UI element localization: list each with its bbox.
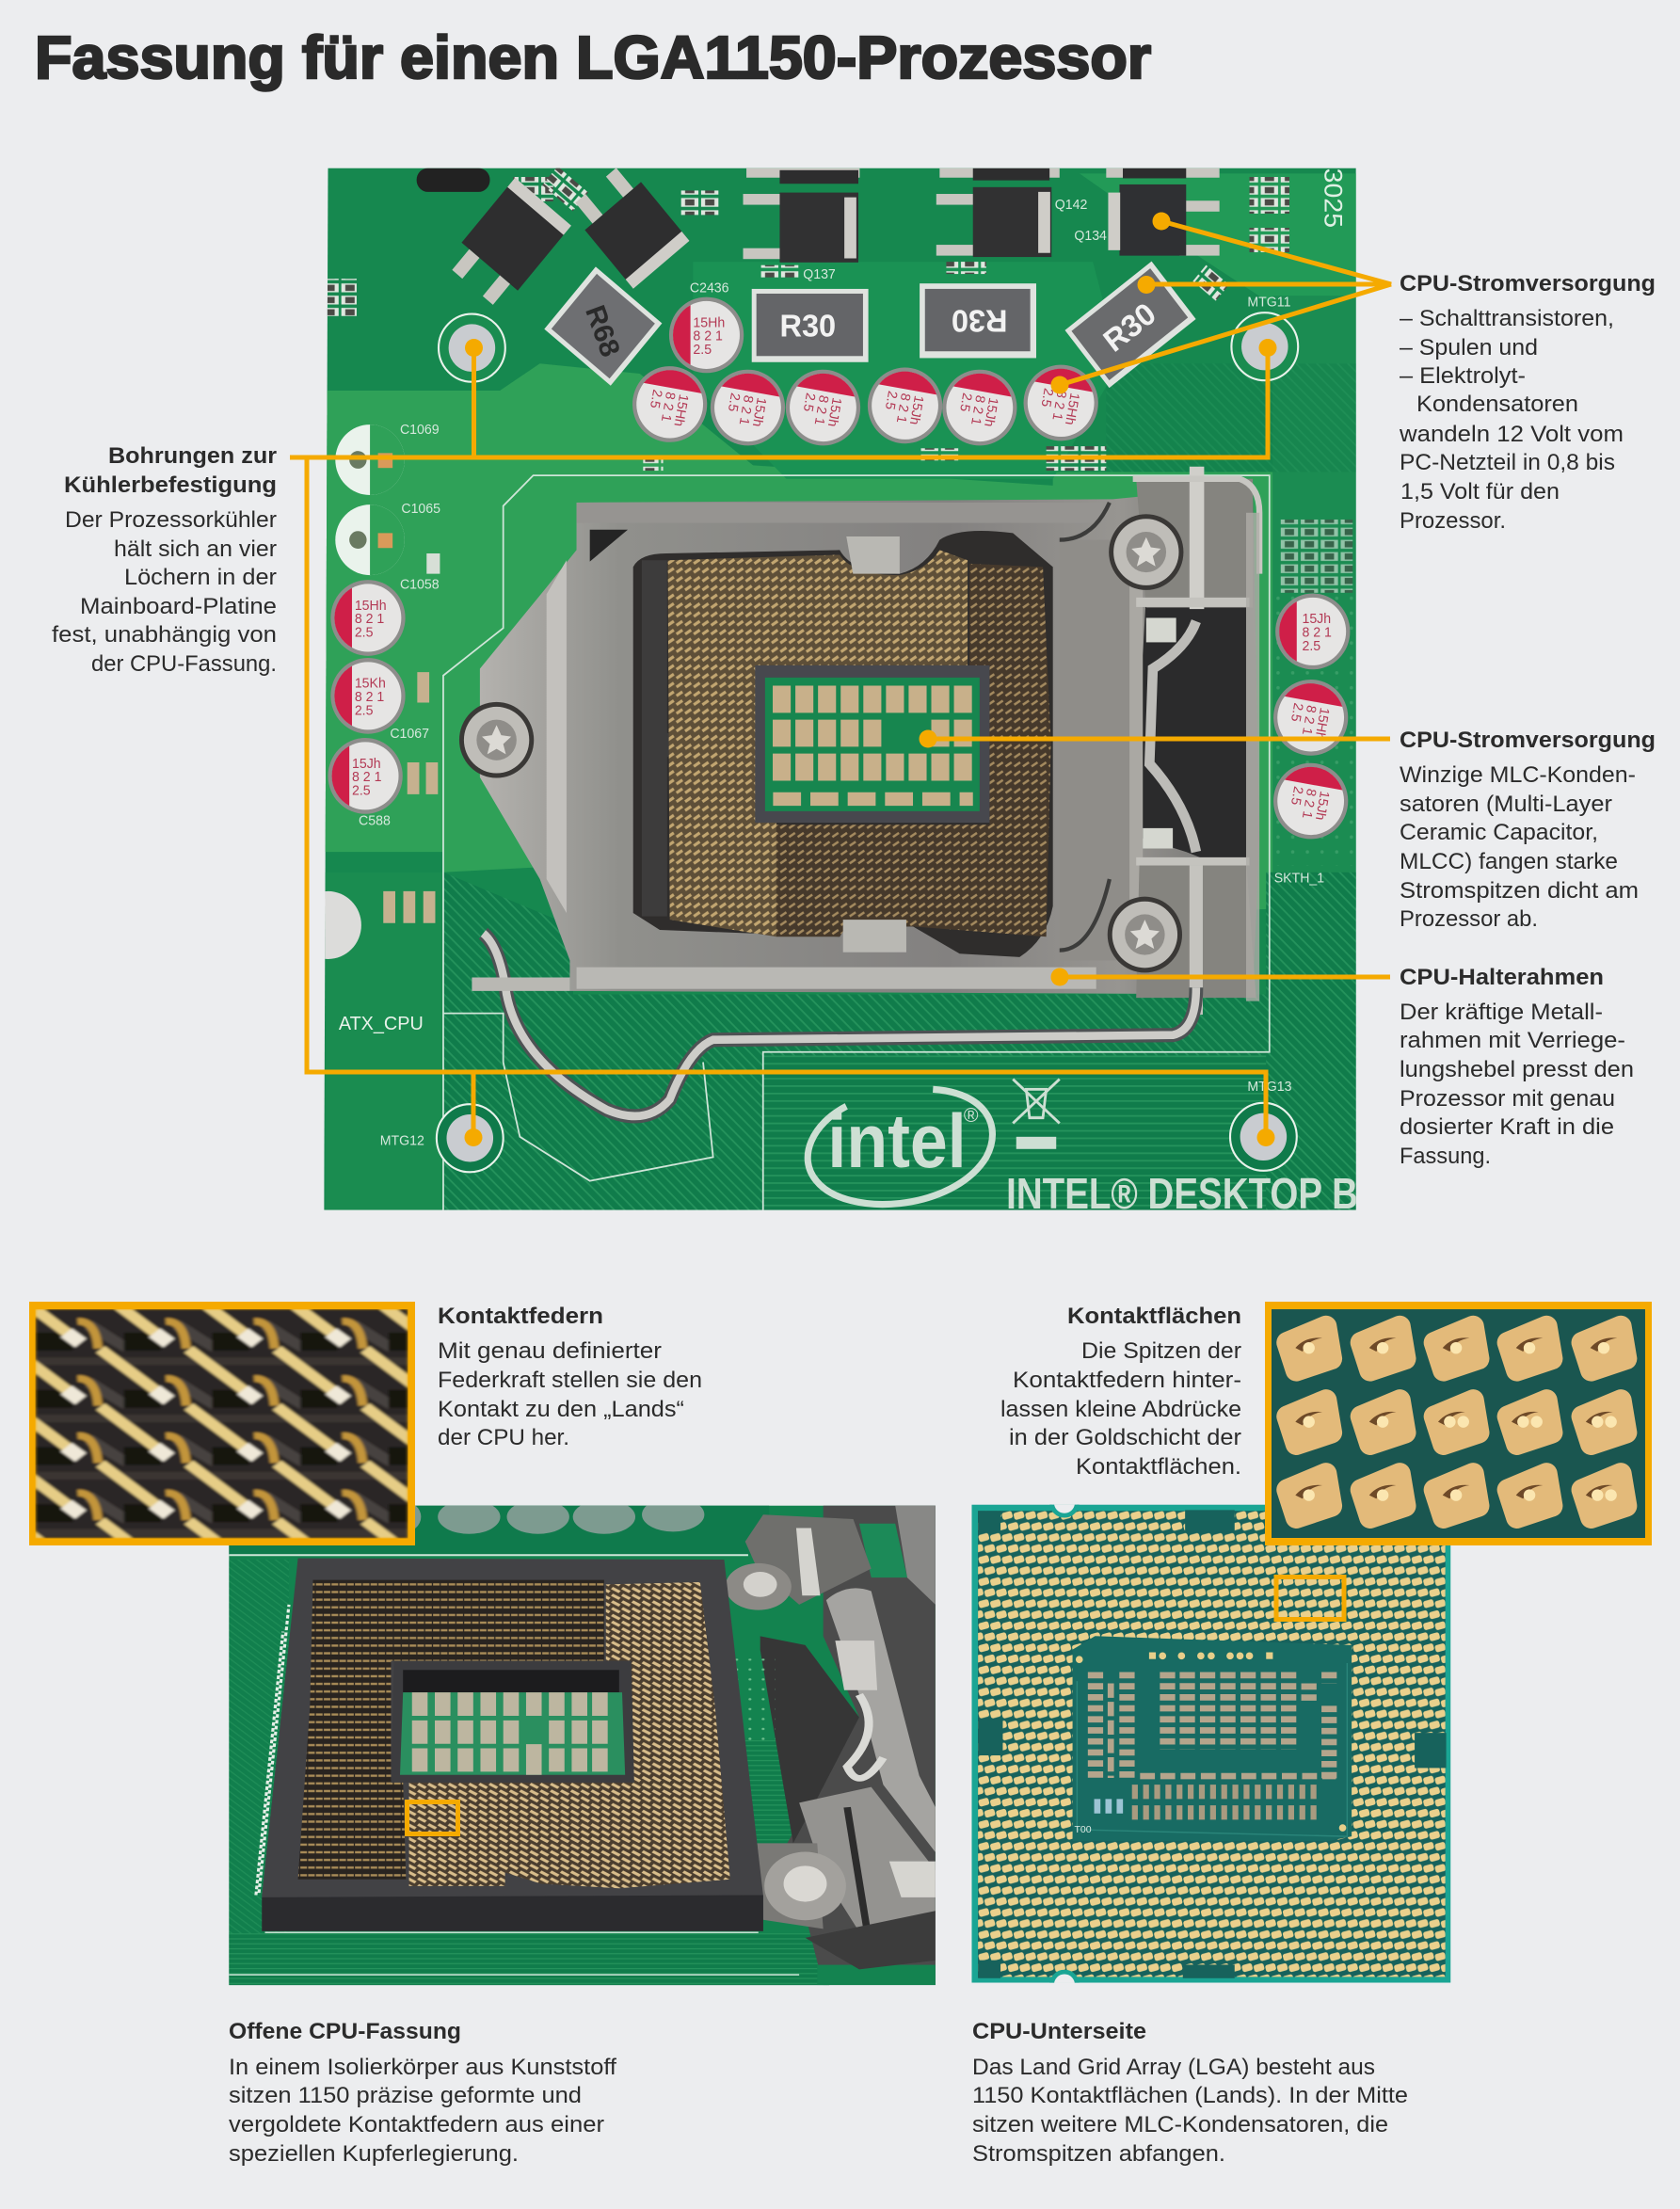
text block: CPU-Stromversorgung (MLC): satoren (Multi-Layer (1400, 792, 1612, 817)
center cavity with MLC capacitors (391, 1661, 634, 1783)
text block: Bohrungen zur Kühlerbefestigung: fest, unabhängig von (52, 622, 277, 648)
text block: Bohrungen zur Kühlerbefestigung (52, 443, 277, 677)
text block: Kontaktflächen (1000, 1304, 1241, 1480)
electrolytic capacitors: 2.5 (956, 392, 974, 413)
text block: CPU-Stromversorgung (Schalttransistoren): Kondensatoren (1416, 392, 1578, 417)
electrolytic capacitors: 15Jh (906, 394, 926, 425)
electrolytic capacitors: 2.5 (352, 783, 371, 799)
text block: Kontaktflächen: lassen kleine Abdrücke (1000, 1397, 1241, 1422)
electrolytic capacitors: 2.5 (693, 343, 712, 358)
electrolytic capacitors: 8 2 1 (1302, 626, 1332, 641)
board labels: MTG12 (380, 1133, 424, 1148)
text block: Bohrungen zur Kühlerbefestigung: Kühlerbefestigung (64, 472, 277, 498)
coils (544, 262, 1196, 388)
coils: R30 (1096, 296, 1162, 359)
electrolytic capacitors: 8 2 1 (893, 392, 913, 424)
electrolytic capacitors: 15Hh (355, 599, 387, 614)
electrolytic capacitors: 8 2 1 (1299, 704, 1319, 736)
text block: Kontaktflächen: Kontaktflächen. (1076, 1454, 1241, 1480)
electrolytic capacitors: 8 2 1 (693, 329, 723, 344)
text block: CPU-Stromversorgung (MLC) (1400, 728, 1656, 932)
text block: CPU-Stromversorgung (Schalttransistoren): wandeln 12 Volt vom (1399, 422, 1624, 447)
coils: R30 (779, 308, 836, 343)
small SMD components (327, 167, 1352, 853)
text block: CPU-Stromversorgung (MLC): CPU-Stromversorgung (1400, 728, 1656, 753)
text block: CPU-Halterahmen: lungshebel presst den (1400, 1057, 1634, 1082)
contact springs dark side (298, 1580, 604, 1880)
land grid (978, 1511, 1446, 1977)
text block: CPU-Stromversorgung (MLC): Prozessor ab. (1400, 906, 1538, 932)
caption: Offene CPU-Fassung: vergoldete Kontaktfedern aus einer (229, 2112, 604, 2137)
electrolytic capacitors: 15Hh (1311, 706, 1332, 741)
text block: CPU-Stromversorgung (Schalttransistoren): PC-Netzteil in 0,8 bis (1400, 450, 1615, 475)
caption: CPU-Unterseite: CPU-Unterseite (972, 2019, 1146, 2044)
retention frame (480, 486, 1259, 994)
electrolytic capacitors: 8 2 1 (658, 391, 678, 423)
leader lines: CPU-Stromversorgung transistors, coils, capacitors (1050, 213, 1391, 393)
board labels (339, 168, 1348, 1148)
electrolytic capacitors: 15Jh (1312, 790, 1332, 822)
caption: Offene CPU-Fassung: sitzen 1150 präzise geformte und (229, 2083, 582, 2108)
electrolytic capacitors (295, 297, 1354, 959)
mounting holes (437, 312, 1298, 1172)
coils: R68 (579, 301, 626, 361)
text block: CPU-Stromversorgung (Schalttransistoren) (1399, 271, 1656, 534)
text block: CPU-Halterahmen: CPU-Halterahmen (1400, 965, 1604, 990)
locking lever and hinge (472, 467, 1259, 1116)
electrolytic capacitors: 15Jh (749, 396, 769, 428)
board labels: C1058 (400, 577, 440, 593)
electrolytic capacitors: 8 2 1 (968, 394, 987, 426)
intel logo and board print: INTEL® DESKTOP B (1006, 1170, 1358, 1218)
text block: CPU-Halterahmen: dosierter Kraft in die (1400, 1114, 1614, 1140)
text block: Bohrungen zur Kühlerbefestigung: hält sich an vier (114, 536, 277, 562)
intel logo and board print: ® (964, 1104, 979, 1127)
highlight box on CPU (1276, 1577, 1344, 1619)
electrolytic capacitors: 8 2 1 (736, 394, 756, 426)
electrolytic capacitors: 2.5 (355, 626, 374, 641)
electrolytic capacitors: 15Hh (693, 315, 725, 330)
leader line: MLC capacitors (919, 730, 1390, 747)
substrate (1272, 1309, 1645, 1538)
switching transistors (417, 161, 1220, 312)
electrolytic capacitors: 8 2 1 (355, 690, 384, 705)
highlight box on socket (407, 1801, 457, 1833)
right side metal hinge (726, 1506, 936, 1985)
text block: Kontaktfedern: Kontaktfedern (438, 1304, 603, 1329)
caption: CPU-Unterseite: Stromspitzen abfangen. (972, 2141, 1225, 2167)
electrolytic capacitors: 15Kh (355, 677, 386, 692)
text block: Kontaktflächen: Kontaktflächen (1067, 1304, 1241, 1329)
electrolytic capacitors: 2.5 (882, 390, 900, 410)
text block: CPU-Halterahmen (1400, 965, 1634, 1169)
caption: Offene CPU-Fassung (229, 2019, 616, 2167)
electrolytic capacitors: 15Jh (352, 757, 381, 772)
electrolytic capacitors: 2.5 (1288, 701, 1305, 723)
gold lands (1288, 1326, 1626, 1517)
substrate (971, 1505, 1450, 1983)
text block: Bohrungen zur Kühlerbefestigung: Löchern in der (124, 565, 277, 590)
text block: CPU-Halterahmen: rahmen mit Verriege- (1400, 1028, 1625, 1053)
board labels: C1067 (390, 727, 429, 742)
electrolytic capacitors: 2.5 (725, 392, 743, 413)
caption: Offene CPU-Fassung: In einem Isolierkörper aus Kunststoff (229, 2055, 616, 2080)
text block: CPU-Stromversorgung (MLC): MLCC) fangen starke (1400, 849, 1618, 874)
electrolytic capacitors: 8 2 1 (1299, 788, 1319, 820)
coils: R30 (952, 303, 1008, 339)
silkscreen outlines (443, 475, 1270, 1211)
electrolytic capacitors: 2.5 (1288, 785, 1305, 807)
text block: Bohrungen zur Kühlerbefestigung: Mainboard-Platine (80, 594, 277, 619)
electrolytic capacitors: 15Hh (1062, 392, 1081, 426)
leader line: CPU-Halterahmen (1050, 968, 1390, 986)
title: Fassung für einen LGA1150-Prozessor (35, 24, 1151, 91)
text block: Kontaktfedern: der CPU her. (438, 1425, 569, 1450)
electrolytic capacitors: 8 2 1 (1048, 390, 1069, 422)
text block: Bohrungen zur Kühlerbefestigung: Der Prozessorkühler (65, 507, 277, 533)
electrolytic capacitors: 8 2 1 (811, 394, 831, 426)
text block: Kontaktfedern: Kontakt zu den „Lands“ (438, 1397, 684, 1422)
leader lines: Bohrungen zur Kühlerbefestigung (290, 339, 1276, 1146)
text block: CPU-Stromversorgung (MLC): Stromspitzen dicht am (1400, 878, 1639, 904)
main photo: open socket on mainboard (295, 160, 1386, 1218)
macro spring contacts (36, 1309, 408, 1538)
contact springs right and bottom (776, 564, 1051, 936)
caption: Offene CPU-Fassung: speziellen Kupferlegierung. (229, 2141, 519, 2167)
electrolytic capacitors: 2.5 (355, 703, 374, 719)
inset: Kontaktflächen close-up (1265, 1302, 1652, 1545)
board labels: MTG11 (1247, 296, 1291, 311)
electrolytic capacitors: 2.5 (800, 392, 818, 413)
caption: CPU-Unterseite (972, 2019, 1408, 2167)
text block: Bohrungen zur Kühlerbefestigung: Bohrungen zur (108, 443, 277, 469)
intel logo and board print (808, 1080, 1358, 1218)
center MLC capacitors (755, 665, 989, 823)
caption: Offene CPU-Fassung: Offene CPU-Fassung (229, 2019, 461, 2044)
text block: CPU-Stromversorgung (Schalttransistoren): – Elektrolyt- (1400, 363, 1526, 389)
text block: Kontaktflächen: in der Goldschicht der (1009, 1425, 1241, 1450)
text block: CPU-Stromversorgung (Schalttransistoren): Prozessor. (1400, 508, 1506, 534)
screws (459, 514, 1183, 972)
small fiducial lands (1076, 1653, 1346, 1832)
electrolytic capacitors: 15Jh (981, 396, 1000, 428)
electrolytic capacitors: 2.5 (1302, 639, 1320, 654)
electrolytic capacitors: 15Hh (670, 392, 691, 427)
inset: Kontaktfedern close-up (29, 1302, 415, 1545)
board labels: Q137 (803, 267, 836, 282)
electrolytic capacitors: 2.5 (647, 388, 664, 409)
text block: CPU-Halterahmen: Prozessor mit genau (1400, 1086, 1615, 1112)
notches (1052, 1490, 1077, 1997)
pcb base (320, 160, 1366, 1218)
text block: Kontaktfedern: Federkraft stellen sie den (438, 1368, 702, 1393)
text block: Kontaktfedern: Mit genau definierter (438, 1338, 662, 1364)
empty capacitor footprints (335, 424, 405, 575)
electrolytic capacitors: 8 2 1 (355, 612, 384, 627)
board (229, 1506, 936, 1985)
text block: CPU-Stromversorgung (Schalttransistoren): – Schalttransistoren, (1400, 306, 1614, 331)
text block: Kontaktflächen: Die Spitzen der (1081, 1338, 1241, 1364)
board labels: MTG13 (1247, 1080, 1292, 1095)
text block: Kontaktfedern (438, 1304, 702, 1450)
board labels: C2436 (690, 280, 729, 296)
caption: CPU-Unterseite: 1150 Kontaktflächen (Lands). In der Mitte (972, 2083, 1408, 2108)
board labels: ATX_CPU (339, 1014, 424, 1034)
CPU capacitors (1077, 1663, 1347, 1836)
electrolytic capacitors: 2.5 (1038, 387, 1056, 408)
socket window (633, 531, 1053, 957)
text block: CPU-Stromversorgung (Schalttransistoren): – Spulen und (1400, 335, 1538, 360)
text block: CPU-Stromversorgung (MLC): Winzige MLC-Konden- (1400, 762, 1636, 788)
photo: open CPU socket (229, 1497, 936, 1988)
board labels: C1065 (401, 502, 440, 517)
board labels: Q142 (1055, 198, 1087, 213)
board labels: SKTH_1 (1274, 871, 1324, 887)
text block: CPU-Stromversorgung (MLC): Ceramic Capacitor, (1400, 820, 1598, 845)
contact springs light side (409, 1582, 730, 1888)
text block: CPU-Stromversorgung (Schalttransistoren): CPU-Stromversorgung (1400, 271, 1656, 296)
photo: CPU underside (971, 1490, 1450, 1997)
electrolytic capacitors: 15Jh (824, 396, 844, 428)
substrate print: T00 (1074, 1824, 1092, 1835)
board labels: C588 (359, 813, 391, 828)
text block: CPU-Halterahmen: Fassung. (1400, 1144, 1491, 1169)
electrolytic capacitors: 15Jh (1302, 612, 1331, 627)
intel logo and board print: intel (827, 1099, 967, 1183)
text block: Bohrungen zur Kühlerbefestigung: der CPU-Fassung. (91, 651, 277, 677)
electrolytic capacitors: 8 2 1 (352, 770, 381, 785)
text block: Kontaktflächen: Kontaktfedern hinter- (1013, 1368, 1241, 1393)
caption: CPU-Unterseite: Das Land Grid Array (LGA) besteht aus (972, 2055, 1375, 2080)
capacitors behind socket (415, 1506, 704, 1534)
caption: CPU-Unterseite: sitzen weitere MLC-Kondensatoren, die (972, 2112, 1388, 2137)
text block: CPU-Stromversorgung (Schalttransistoren): 1,5 Volt für den (1400, 479, 1560, 504)
board labels: C1069 (400, 423, 440, 438)
board labels: Q134 (1074, 229, 1107, 244)
contact springs top and left (668, 550, 968, 936)
plastic socket body (262, 1559, 763, 1931)
text block: CPU-Halterahmen: Der kräftige Metall- (1400, 1000, 1603, 1025)
board labels: 3025 (1320, 168, 1348, 228)
